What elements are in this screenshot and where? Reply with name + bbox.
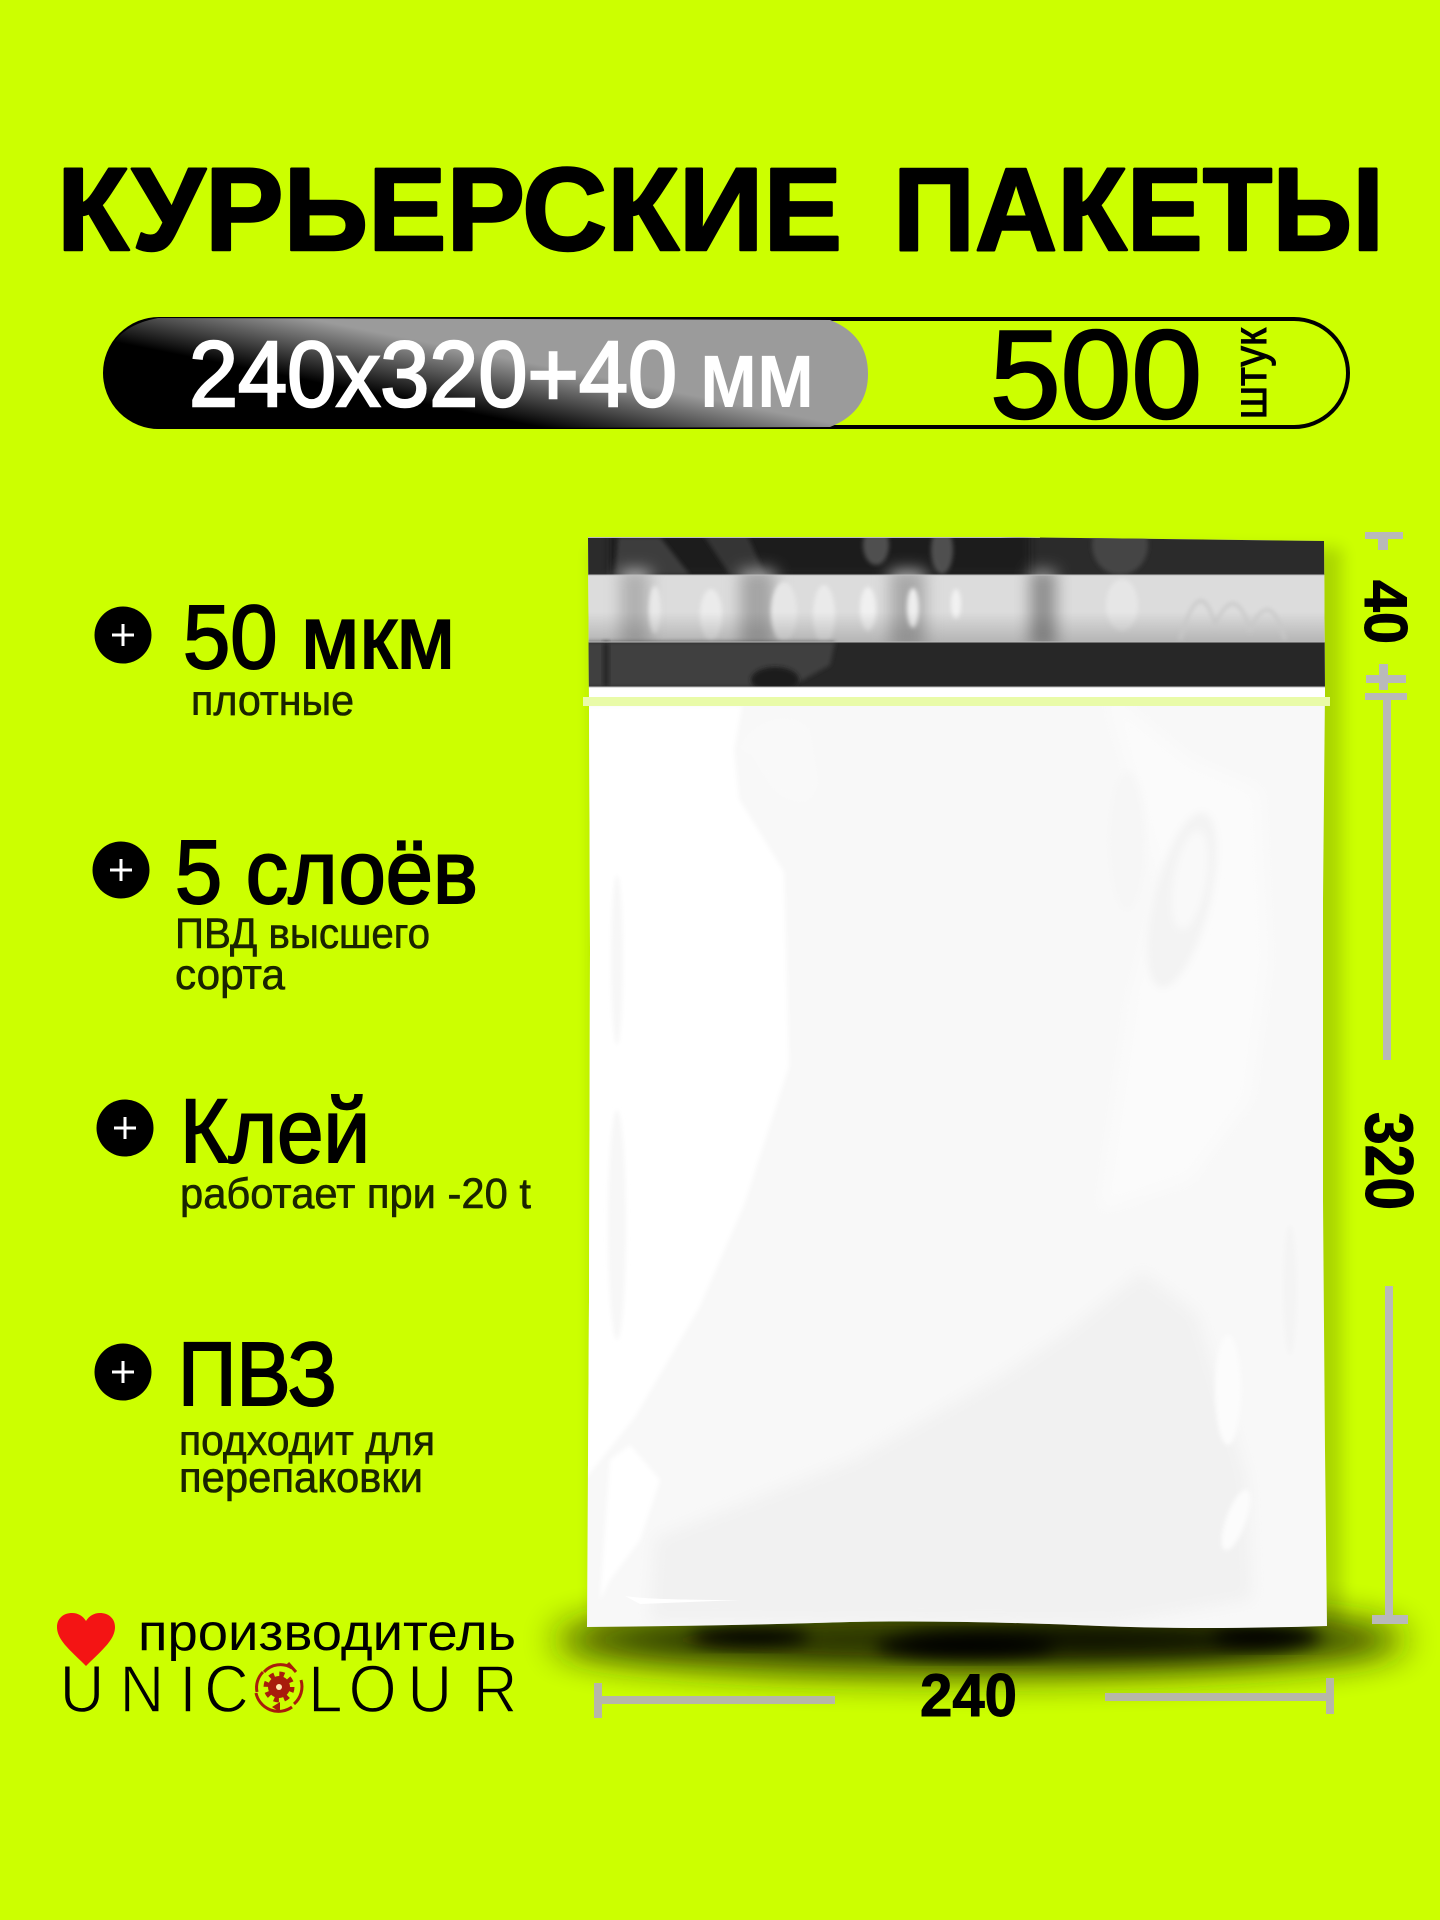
size text: 240x320+40	[189, 322, 677, 426]
feature heading: Клей	[180, 1082, 370, 1182]
feature: layers	[92, 823, 478, 999]
quantity: 500	[990, 306, 1202, 445]
feature heading: 5 слоёв	[175, 823, 478, 923]
feature note: работает при -20 t	[180, 1170, 531, 1218]
dimension: width 240: 240	[920, 1662, 1017, 1729]
pill gradient fill	[105, 318, 868, 429]
feature heading: ПВЗ	[178, 1325, 337, 1425]
title: КУРЬЕРСКИЕ	[57, 144, 842, 276]
adhesive band	[580, 570, 1335, 647]
pill outline	[105, 319, 1348, 427]
band edge lines	[580, 538, 1335, 687]
brand name: UNICOLOUR	[60, 1652, 517, 1727]
icon: plus badge	[92, 842, 150, 898]
icon: plus badge	[94, 1344, 152, 1400]
manufacturer caption: производитель	[138, 1604, 516, 1662]
title	[57, 144, 1384, 276]
size and quantity pill	[105, 306, 1348, 445]
feature heading: 50 мкм	[183, 588, 455, 688]
feature note line 2: сорта	[175, 951, 285, 999]
icon: heart	[57, 1613, 115, 1666]
dimension: flap 40	[1352, 532, 1419, 690]
icon: gear with arrows	[254, 1662, 304, 1712]
bag body	[580, 530, 1335, 1635]
bag shadow	[555, 548, 1405, 1674]
feature: pickup points	[94, 1325, 435, 1502]
tear line	[583, 697, 1330, 706]
dimension: width 240	[594, 1662, 1334, 1729]
quantity unit: штук	[1224, 327, 1276, 419]
icon: plus badge	[94, 606, 152, 664]
feature note: ПВД высшего	[175, 910, 430, 958]
title: ПАКЕТЫ	[893, 144, 1384, 276]
top white strip	[588, 687, 1325, 697]
body highlight and wrinkles	[586, 690, 1297, 1623]
feature: glue	[96, 1082, 531, 1218]
dimension: height 320: 320	[1351, 1112, 1427, 1210]
courier bag	[580, 515, 1335, 1635]
feature note line 2: перепаковки	[179, 1454, 423, 1502]
icon: plus badge	[96, 1100, 154, 1156]
lower dark seal stripe	[580, 642, 1335, 693]
feature note: плотные	[191, 677, 354, 725]
top dark seal stripe	[588, 537, 1324, 575]
dimension: height 320	[1351, 693, 1427, 1624]
size unit: мм	[700, 322, 814, 426]
manufacturer logo	[57, 1604, 517, 1727]
feature: thickness	[94, 588, 455, 725]
feature note: подходит для	[179, 1417, 435, 1465]
dimension: flap 40: 40	[1352, 580, 1419, 644]
